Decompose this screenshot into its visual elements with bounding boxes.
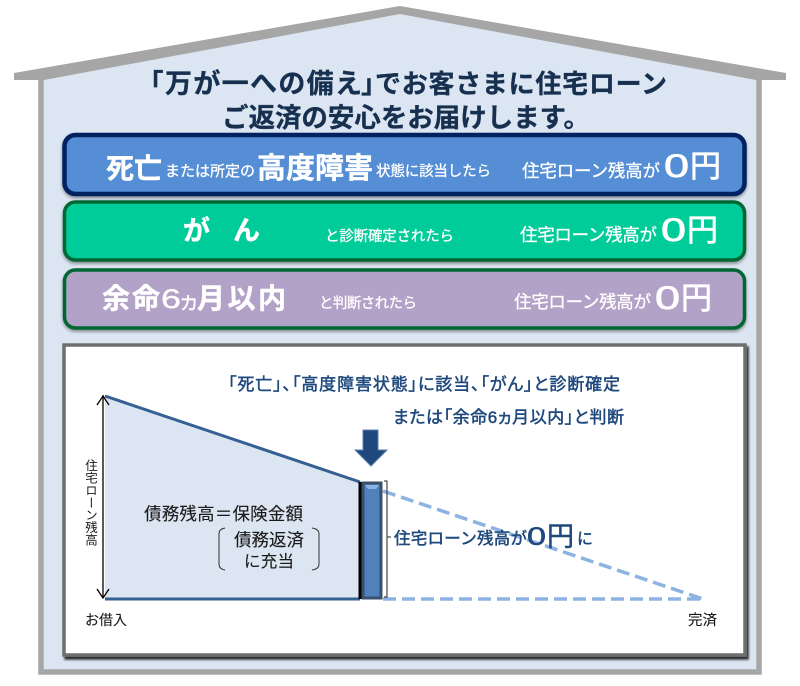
insurance payoff bar [363,483,381,598]
panel: death or disability: 高度障害 [257,152,373,185]
panel: cancer: がん [183,215,260,246]
label: balance zero: 住宅ローン残高が [394,529,528,548]
label: loan start: お借入 [85,612,127,628]
panel: six months to live: 余命 [102,283,160,314]
panel: six months to live [64,270,744,328]
panel: death or disability: 死亡 [106,153,162,184]
panel: cancer [64,202,744,260]
panel: six months to live: 住宅ローン残高が [514,292,652,312]
panel: six months to live: 円 [681,281,712,316]
title [137,68,667,133]
panel: six months to live: 月以内 [197,283,286,314]
title: 」 [361,69,388,99]
title: 「 [137,69,164,99]
brace: payoff amount [384,481,391,597]
event caption: 「死亡」、「高度障害状態」に該当、「がん」と診断確定 [228,375,620,394]
panel: cancer: 住宅ローン残高が [520,225,658,245]
label: balance zero: 円 [547,522,574,552]
panel: six months to live: ヵ [178,289,200,314]
panel: death or disability: 住宅ローン残高が [522,161,660,181]
label: debt equals insurance [144,504,319,571]
event caption [228,375,624,427]
label: balance zero: 0 [527,523,546,551]
event caption: または「余命6ヵ月以内」と判断 [393,408,624,427]
panel: death or disability: または所定の [165,163,255,180]
label: balance zero [394,522,593,552]
title: 万が一への備え [165,68,362,99]
panel: six months to live: 0 [655,280,680,316]
panel: repayment chart [64,345,745,655]
label: balance zero: に [577,531,593,548]
panel: death or disability: 0 [664,148,689,184]
chart: insured loan balance area [105,396,362,599]
title: でお客さまに住宅ローン [375,69,667,99]
panel: six months to live: と判断されたら [319,295,417,312]
panel: cancer: 0 [661,212,686,248]
arrow: event point [355,430,387,466]
label: debt equals insurance: 債務残高＝保険金額 [144,504,304,524]
panel: death or disability [64,135,744,194]
label: debt equals insurance: に充当 [244,552,294,571]
panel: death or disability: 円 [690,149,721,184]
panel: cancer: と診断確定されたら [325,228,454,245]
panel: six months to live: 6 [161,284,181,314]
panel: death or disability: 状態に該当したら [376,163,491,180]
label: debt equals insurance: 債務返済 [234,530,304,550]
title: ご返済の安心をお届けします。 [222,103,590,133]
label: paid off: 完済 [688,612,718,629]
panel: cancer: 円 [687,213,718,248]
dashed paid-off lines [383,491,703,599]
arrow: loan balance height [97,395,109,598]
axis label: loan balance: 住宅ローン残高 [83,459,97,546]
